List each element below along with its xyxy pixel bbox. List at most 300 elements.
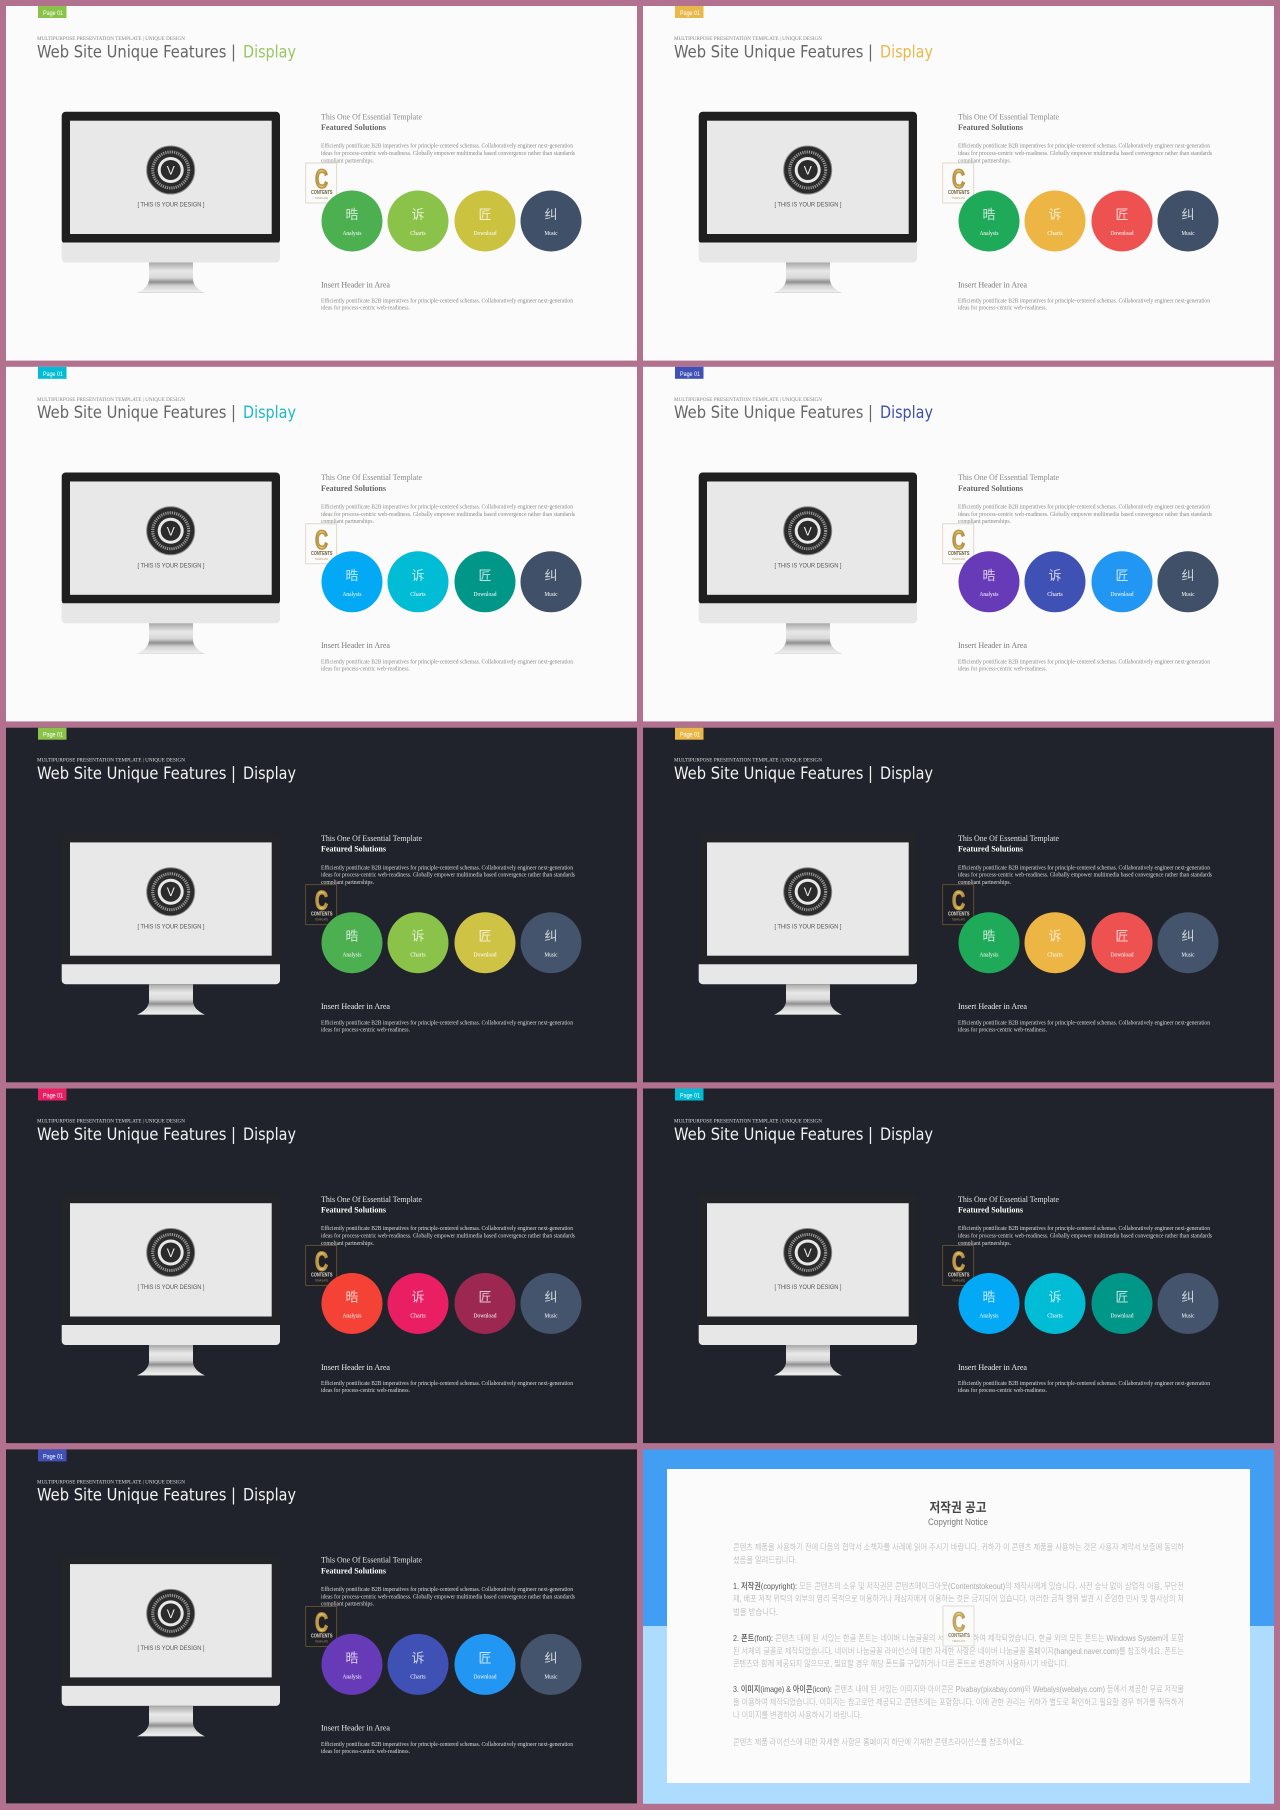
paragraph: compliant partnerships. [958, 519, 1011, 525]
page tag: Page 01 [680, 10, 700, 17]
panel: dark teal [643, 1088, 1274, 1443]
stamp: TEMPLATE [952, 1640, 966, 1643]
panel: light teal [6, 367, 637, 721]
circle icons: Charts [1047, 231, 1063, 237]
circle icons: 纠 [1181, 926, 1195, 945]
lower paragraph: Efficiently pontificate B2B imperatives for principle-centered schemas. Collaboratively engineer next-generation [958, 298, 1210, 305]
stamp [943, 524, 974, 564]
paragraph: Efficiently pontificate B2B imperatives for principle-centered schemas. Collaboratively engineer next-generation [321, 503, 573, 510]
lower paragraph: ideas for process-centric web-readiness. [321, 1387, 410, 1394]
stamp: CONTENTS [948, 912, 970, 918]
circle icons: Analysis [980, 953, 999, 959]
stamp: CONTENTS [311, 1272, 333, 1278]
heading block: This One Of Essential Template [321, 473, 422, 482]
lower paragraph [321, 658, 573, 672]
section 3: 3. 이미지(image) & 아이콘(icon): [733, 1684, 832, 1694]
design caption: [ THIS IS YOUR DESIGN ] [138, 202, 205, 209]
circle icons: 晧 [345, 204, 359, 223]
heading block: Featured Solutions [321, 484, 386, 493]
lower paragraph: ideas for process-centric web-readiness. [321, 305, 410, 312]
lower paragraph [958, 1380, 1210, 1394]
stamp: C [952, 886, 965, 916]
monitor [699, 833, 917, 1015]
heading block: Featured Solutions [321, 1566, 386, 1575]
circle icons: Charts [410, 231, 426, 237]
subtitle: MULTIPURPOSE PRESENTATION TEMPLATE | UNIQUE DESIGN [674, 758, 822, 764]
circle icons: 晧 [982, 565, 996, 584]
heading block: This One Of Essential Template [958, 834, 1059, 843]
page tag [675, 728, 704, 740]
lower paragraph [958, 298, 1210, 312]
design caption: [ THIS IS YOUR DESIGN ] [138, 562, 205, 569]
logo badge [147, 1228, 195, 1276]
lower paragraph: ideas for process-centric web-readiness. [958, 305, 1047, 312]
circle icons [322, 1634, 582, 1695]
circle icons: 纠 [544, 565, 558, 584]
circle icons: 晧 [982, 926, 996, 945]
stamp [306, 524, 337, 564]
circle icons: Download [474, 231, 496, 237]
stamp: C [952, 1607, 965, 1637]
title: Display [243, 1486, 296, 1505]
paragraph [321, 864, 576, 886]
heading block [321, 1556, 422, 1575]
circle icons: 匠 [478, 204, 492, 223]
stamp: TEMPLATE [315, 919, 328, 922]
heading block [958, 473, 1059, 493]
circle icons: 诉 [411, 1647, 425, 1666]
title: Web Site Unique Features | [37, 1125, 236, 1144]
title: Display [243, 42, 296, 61]
paragraph [321, 1586, 576, 1608]
title: Display [243, 764, 296, 783]
design caption: [ THIS IS YOUR DESIGN ] [774, 202, 842, 209]
heading block: Featured Solutions [958, 123, 1023, 132]
lower paragraph: Efficiently pontificate B2B imperatives for principle-centered schemas. Collaboratively engineer next-generation [958, 1380, 1210, 1387]
lower paragraph: Efficiently pontificate B2B imperatives for principle-centered schemas. Collaboratively engineer next-generation [321, 1380, 573, 1387]
panel: light indigo [643, 367, 1274, 721]
lower paragraph: Efficiently pontificate B2B imperatives for principle-centered schemas. Collaboratively engineer next-generation [321, 1741, 573, 1748]
stamp: CONTENTS [948, 190, 970, 196]
section 3: 을 이용하여 제작되었습니다. 이미지는 참고로만 제공되고 콘텐츠에는 포함합니다. 이에 관한 권리는 귀하가 별도로 확인하고 필요할 경우 허가를 취득하거 [733, 1697, 1184, 1707]
subtitle: MULTIPURPOSE PRESENTATION TEMPLATE | UNIQUE DESIGN [674, 1118, 822, 1124]
paragraph: ideas for process-centric web-readiness. Globally empower multimedia based convergence rather than standards [321, 872, 576, 879]
paragraph: Efficiently pontificate B2B imperatives for principle-centered schemas. Collaboratively engineer next-generation [321, 1586, 573, 1593]
design caption: [ THIS IS YOUR DESIGN ] [138, 923, 205, 930]
title: Web Site Unique Features | [37, 42, 236, 61]
stamp [943, 163, 974, 203]
section 3: 나 이미지를 변경하여 사용하시기 바랍니다. [733, 1710, 862, 1720]
subtitle: MULTIPURPOSE PRESENTATION TEMPLATE | UNIQUE DESIGN [674, 36, 822, 42]
circle icons: 诉 [411, 1286, 425, 1306]
circle icons: Charts [410, 1314, 426, 1320]
heading block: Featured Solutions [958, 1206, 1023, 1214]
monitor [62, 1555, 280, 1736]
circle icons: 纠 [544, 204, 558, 223]
heading block [321, 834, 422, 854]
design caption: [ THIS IS YOUR DESIGN ] [774, 923, 842, 930]
paragraph: Efficiently pontificate B2B imperatives for principle-centered schemas. Collaboratively engineer next-generation [321, 143, 573, 150]
title: Web Site Unique Features | [37, 1486, 236, 1505]
circle icons: 匠 [478, 565, 492, 584]
section 1: 모든 콘텐츠의 소유 및 저작권은 콘텐츠메이크아웃(Contentstokeout)의 제작사에게 있습니다. 사전 승낙 없이 상업적 이용, 무단전 [799, 1581, 1184, 1591]
circle icons: Charts [1047, 1314, 1063, 1320]
logo badge [784, 1228, 832, 1276]
circle icons: 匠 [1115, 204, 1129, 223]
heading block: Featured Solutions [958, 845, 1023, 854]
circle icons [958, 1273, 1218, 1334]
circle icons: Analysis [342, 953, 362, 959]
heading block: Featured Solutions [321, 123, 386, 132]
title: Display [243, 403, 296, 422]
title: Display [880, 403, 933, 422]
paragraph: Efficiently pontificate B2B imperatives for principle-centered schemas. Collaboratively engineer next-generation [958, 1225, 1210, 1232]
design caption: [ THIS IS YOUR DESIGN ] [138, 1284, 205, 1291]
stamp: CONTENTS [311, 912, 333, 918]
logo badge [784, 507, 832, 555]
paragraph: compliant partnerships. [958, 1241, 1011, 1247]
paragraph: ideas for process-centric web-readiness. Globally empower multimedia based convergence rather than standards [321, 1232, 576, 1240]
paragraph: ideas for process-centric web-readiness. Globally empower multimedia based convergence rather than standards [958, 872, 1213, 879]
lower paragraph: ideas for process-centric web-readiness. [321, 666, 410, 672]
circle icons: 匠 [1115, 1286, 1129, 1306]
logo badge [784, 146, 832, 194]
monitor [62, 472, 280, 654]
logo badge: V [167, 164, 175, 178]
stamp: TEMPLATE [315, 1280, 328, 1282]
section 1: 재, 배포 저작 위탁의 외부의 영리 목적으로 이용하거나 제삼자에게 이용하는 것은 금지되어 있습니다. 이러한 금칙 행위 발견 시 준엄한 민사 및 형사상의 처 [733, 1594, 1184, 1604]
logo badge: V [167, 524, 175, 538]
circle icons: 诉 [411, 565, 425, 584]
page tag: Page 01 [43, 371, 63, 378]
section 2: 콘텐츠와 함께 제공되지 않으므로, 필요할 경우 해당 폰트를 구입하거나 다른 폰트로 변경하여 사용하시기 바랍니다. [733, 1658, 1069, 1668]
paragraph: compliant partnerships. [321, 1241, 374, 1247]
heading block [321, 473, 422, 493]
circle icons [322, 912, 582, 973]
paragraph [958, 1225, 1213, 1247]
section 1: 벌을 받습니다. [733, 1607, 778, 1617]
paragraph: compliant partnerships. [958, 880, 1011, 886]
title: Web Site Unique Features | [674, 764, 873, 783]
insert header: Insert Header in Area [321, 1002, 390, 1011]
paragraph: ideas for process-centric web-readiness. Globally empower multimedia based convergence rather than standards [958, 511, 1213, 518]
circle icons: 诉 [1048, 204, 1062, 223]
page tag: Page 01 [43, 1092, 63, 1100]
design caption: [ THIS IS YOUR DESIGN ] [138, 1645, 205, 1652]
page tag [38, 728, 66, 740]
heading block: Featured Solutions [321, 1206, 386, 1214]
logo badge: V [804, 164, 812, 178]
paragraph: compliant partnerships. [321, 519, 374, 525]
design caption: [ THIS IS YOUR DESIGN ] [774, 562, 842, 569]
circle icons: 晧 [345, 1647, 359, 1666]
heading block: Featured Solutions [321, 845, 386, 854]
page tag [675, 1088, 704, 1100]
title: Display [880, 764, 933, 783]
logo badge: V [804, 885, 812, 899]
circle icons: Charts [1047, 592, 1063, 598]
circle icons: Download [1110, 1314, 1134, 1320]
panel: dark crimson [6, 1088, 637, 1443]
paragraph [958, 864, 1213, 886]
paragraph: compliant partnerships. [321, 880, 374, 886]
circle icons: 匠 [1115, 565, 1129, 584]
stamp: CONTENTS [948, 1272, 970, 1278]
panel: copyright notice [643, 1449, 1274, 1804]
section 2: 2. 폰트(font): [733, 1633, 773, 1643]
paragraph [321, 143, 576, 164]
logo badge: V [804, 1246, 812, 1260]
subtitle: MULTIPURPOSE PRESENTATION TEMPLATE | UNIQUE DESIGN [37, 1118, 185, 1124]
subtitle: MULTIPURPOSE PRESENTATION TEMPLATE | UNIQUE DESIGN [37, 758, 185, 764]
lower paragraph: ideas for process-centric web-readiness. [321, 1748, 410, 1755]
panel: dark indigo [6, 1449, 637, 1803]
stamp: C [315, 1607, 328, 1637]
circle icons [322, 1273, 582, 1334]
lower paragraph [958, 1019, 1210, 1033]
title: Web Site Unique Features | [674, 403, 873, 422]
lower paragraph: ideas for process-centric web-readiness. [958, 1387, 1047, 1394]
circle icons: Music [544, 1674, 558, 1680]
page tag [38, 1449, 66, 1461]
circle icons: 匠 [1115, 926, 1129, 945]
circle icons: Charts [410, 953, 426, 959]
monitor [62, 112, 280, 293]
insert header: Insert Header in Area [321, 1363, 390, 1372]
circle icons: Download [474, 592, 496, 598]
circle icons: 纠 [1181, 1286, 1195, 1306]
stamp: C [952, 164, 965, 194]
circle icons: Download [1110, 953, 1134, 959]
circle icons: Analysis [342, 592, 362, 598]
heading block [321, 1195, 422, 1214]
circle icons: Download [474, 1674, 496, 1680]
intro text: 셨음을 알려드립니다. [733, 1555, 797, 1565]
paragraph [321, 504, 576, 525]
paragraph: ideas for process-centric web-readiness. Globally empower multimedia based convergence rather than standards [321, 511, 576, 518]
stamp: TEMPLATE [952, 558, 965, 561]
monitor [62, 1194, 280, 1376]
title: Web Site Unique Features | [37, 403, 236, 422]
section 1 [733, 1581, 1184, 1617]
stamp: CONTENTS [311, 551, 333, 557]
circle icons: Charts [1047, 953, 1063, 959]
circle icons: Download [474, 953, 496, 959]
page tag [38, 6, 66, 18]
section 2: 된 서체의 글꼴로 제작되었습니다. 네이버 나눔글꼴 라이선스에 대한 자세한 사항은 네이버 나눔글꼴 홈페이지(hangeul.naver.com)를 참조하세요. 폰트는 [733, 1646, 1184, 1656]
paragraph: ideas for process-centric web-readiness. Globally empower multimedia based convergence rather than standards [958, 1232, 1213, 1240]
section 3: 콘텐츠 내에 된 서있는 이미지와 아이콘은 Pixabay(pixabay.com)와 Webalys(webalys.com) 등에서 제공한 무료 저작물 [834, 1684, 1184, 1694]
panel: dark green [6, 728, 637, 1082]
subtitle: MULTIPURPOSE PRESENTATION TEMPLATE | UNIQUE DESIGN [37, 36, 185, 42]
stamp: TEMPLATE [952, 919, 965, 922]
circle icons: 诉 [1048, 1286, 1062, 1306]
circle icons: Charts [410, 1674, 426, 1680]
intro text [733, 1542, 1184, 1565]
circle icons: Download [474, 1314, 496, 1320]
lower paragraph [958, 658, 1210, 672]
stamp [306, 1606, 337, 1646]
circle icons [958, 190, 1218, 252]
title: Web Site Unique Features | [674, 1125, 873, 1144]
lower paragraph: ideas for process-centric web-readiness. [321, 1026, 410, 1033]
title: Display [243, 1125, 296, 1144]
paragraph [958, 504, 1213, 525]
monitor [699, 472, 917, 654]
section 1: 1. 저작권(copyright): [733, 1581, 797, 1591]
logo badge [784, 868, 832, 916]
page tag [38, 367, 66, 379]
circle icons [322, 190, 582, 252]
circle icons: Music [1182, 1314, 1195, 1320]
stamp [306, 163, 337, 203]
panel: light amber [643, 6, 1274, 361]
heading block: This One Of Essential Template [321, 112, 422, 121]
circle icons: 纠 [1181, 565, 1195, 584]
paragraph: compliant partnerships. [958, 158, 1011, 164]
circle icons: Download [1110, 231, 1134, 237]
stamp [943, 885, 974, 925]
insert header: Insert Header in Area [958, 1363, 1027, 1372]
stamp: C [315, 164, 328, 194]
circle icons: Analysis [342, 231, 362, 237]
circle icons [958, 912, 1218, 973]
stamp [943, 1606, 974, 1646]
stamp [943, 1246, 974, 1286]
lower paragraph: Efficiently pontificate B2B imperatives for principle-centered schemas. Collaboratively engineer next-generation [321, 1019, 573, 1026]
stamp: TEMPLATE [315, 558, 328, 561]
circle icons: 晧 [345, 565, 359, 584]
lower paragraph: Efficiently pontificate B2B imperatives for principle-centered schemas. Collaboratively engineer next-generation [958, 1019, 1210, 1026]
stamp: TEMPLATE [315, 197, 328, 200]
heading block: Featured Solutions [958, 484, 1023, 493]
page tag: Page 01 [43, 1453, 63, 1460]
subtitle: MULTIPURPOSE PRESENTATION TEMPLATE | UNIQUE DESIGN [37, 1479, 185, 1485]
heading block [321, 112, 422, 132]
circle icons: 纠 [544, 1647, 558, 1666]
paragraph: compliant partnerships. [321, 1602, 374, 1608]
panel: light green [6, 6, 637, 361]
subtitle: MULTIPURPOSE PRESENTATION TEMPLATE | UNIQUE DESIGN [37, 397, 185, 403]
design caption: [ THIS IS YOUR DESIGN ] [774, 1284, 842, 1291]
circle icons: Music [544, 592, 558, 598]
heading block [958, 1195, 1059, 1214]
panel: dark amber [643, 728, 1274, 1082]
page tag: Page 01 [680, 1092, 700, 1100]
stamp: CONTENTS [948, 551, 970, 557]
circle icons: Analysis [980, 231, 999, 237]
circle icons: 诉 [411, 204, 425, 223]
circle icons: 诉 [411, 926, 425, 945]
circle icons: Analysis [342, 1314, 362, 1320]
circle icons: 晧 [345, 1286, 359, 1306]
lower paragraph: ideas for process-centric web-readiness. [958, 666, 1047, 672]
paragraph [958, 143, 1213, 164]
paragraph: ideas for process-centric web-readiness. Globally empower multimedia based convergence rather than standards [958, 150, 1213, 157]
section 2 [733, 1633, 1184, 1668]
stamp: C [952, 525, 965, 555]
circle icons: 匠 [478, 1647, 492, 1666]
heading block [958, 834, 1059, 854]
heading block: This One Of Essential Template [321, 1195, 422, 1204]
circle icons: 诉 [1048, 926, 1062, 945]
stamp: TEMPLATE [952, 197, 965, 200]
paragraph: ideas for process-centric web-readiness. Globally empower multimedia based convergence rather than standards [321, 1593, 576, 1600]
paragraph: Efficiently pontificate B2B imperatives for principle-centered schemas. Collaboratively engineer next-generation [958, 864, 1210, 871]
notice heading: 저작권 공고 [930, 1500, 987, 1515]
circle icons: Music [544, 953, 558, 959]
circle icons: Analysis [980, 1314, 999, 1320]
page tag [675, 6, 704, 18]
closing note: 콘텐츠 제품 라이선스에 대한 자세한 사항은 홈페이지 하단에 기재한 콘텐츠라이선스를 참조하세요. [733, 1737, 1024, 1747]
section 2: 콘텐츠 내에 된 서있는 한글 폰트는 네이버 나눔글꼴의 서체를 사용하여 제작되었습니다. 한글 외의 모든 폰트는 Windows System에 포함 [775, 1633, 1184, 1643]
section 3 [733, 1684, 1184, 1720]
page tag: Page 01 [43, 10, 63, 17]
paragraph: Efficiently pontificate B2B imperatives for principle-centered schemas. Collaboratively engineer next-generation [958, 143, 1210, 150]
circle icons: 晧 [345, 926, 359, 945]
circle icons [322, 551, 582, 612]
stamp: CONTENTS [311, 1633, 333, 1639]
heading block: This One Of Essential Template [958, 1195, 1059, 1204]
lower paragraph [321, 1380, 573, 1394]
lower paragraph: Efficiently pontificate B2B imperatives for principle-centered schemas. Collaboratively engineer next-generation [958, 658, 1210, 666]
logo badge: V [167, 885, 175, 899]
logo badge: V [167, 1607, 175, 1621]
circle icons: Analysis [342, 1674, 362, 1680]
title: Web Site Unique Features | [674, 42, 873, 61]
circle icons: Music [544, 1314, 558, 1320]
intro text: 콘텐츠 제품을 사용하기 전에 다음의 협약서 소책자를 사례에 읽어 주시기 바랍니다. 귀하가 이 콘텐츠 제품을 사용하는 것은 사용자 계약서 보증에 동의하 [733, 1542, 1184, 1552]
stamp: C [952, 1246, 965, 1276]
circle icons: 晧 [982, 204, 996, 223]
insert header: Insert Header in Area [958, 641, 1027, 650]
paragraph: Efficiently pontificate B2B imperatives for principle-centered schemas. Collaboratively engineer next-generation [321, 1225, 573, 1232]
circle icons: Music [1182, 592, 1195, 598]
heading block [958, 112, 1059, 132]
logo badge [147, 1589, 195, 1637]
page tag [675, 367, 704, 379]
page tag [38, 1088, 66, 1100]
insert header: Insert Header in Area [321, 280, 390, 289]
circle icons: 诉 [1048, 565, 1062, 584]
heading block: This One Of Essential Template [958, 112, 1059, 121]
subtitle: MULTIPURPOSE PRESENTATION TEMPLATE | UNIQUE DESIGN [674, 397, 822, 403]
page tag: Page 01 [680, 371, 700, 378]
stamp: TEMPLATE [952, 1280, 965, 1282]
lower paragraph: Efficiently pontificate B2B imperatives for principle-centered schemas. Collaboratively engineer next-generation [321, 298, 573, 305]
paragraph: Efficiently pontificate B2B imperatives for principle-centered schemas. Collaboratively engineer next-generation [958, 503, 1210, 510]
logo badge [147, 868, 195, 916]
logo badge: V [804, 524, 812, 538]
paragraph: ideas for process-centric web-readiness. Globally empower multimedia based convergence rather than standards [321, 150, 576, 157]
notice subheading: Copyright Notice [928, 1517, 988, 1527]
insert header: Insert Header in Area [958, 280, 1027, 289]
stamp: CONTENTS [948, 1633, 970, 1639]
circle icons [958, 551, 1218, 612]
circle icons: Music [544, 231, 558, 237]
paragraph: Efficiently pontificate B2B imperatives for principle-centered schemas. Collaboratively engineer next-generation [321, 864, 573, 871]
heading block: This One Of Essential Template [958, 473, 1059, 482]
title: Display [880, 1125, 933, 1144]
logo badge [147, 146, 195, 194]
monitor [62, 833, 280, 1015]
lower paragraph: ideas for process-centric web-readiness. [958, 1026, 1047, 1033]
lower paragraph [321, 1019, 573, 1033]
circle icons: 纠 [1181, 204, 1195, 223]
title: Display [880, 42, 933, 61]
circle icons: 匠 [478, 1286, 492, 1306]
circle icons: 晧 [982, 1286, 996, 1306]
